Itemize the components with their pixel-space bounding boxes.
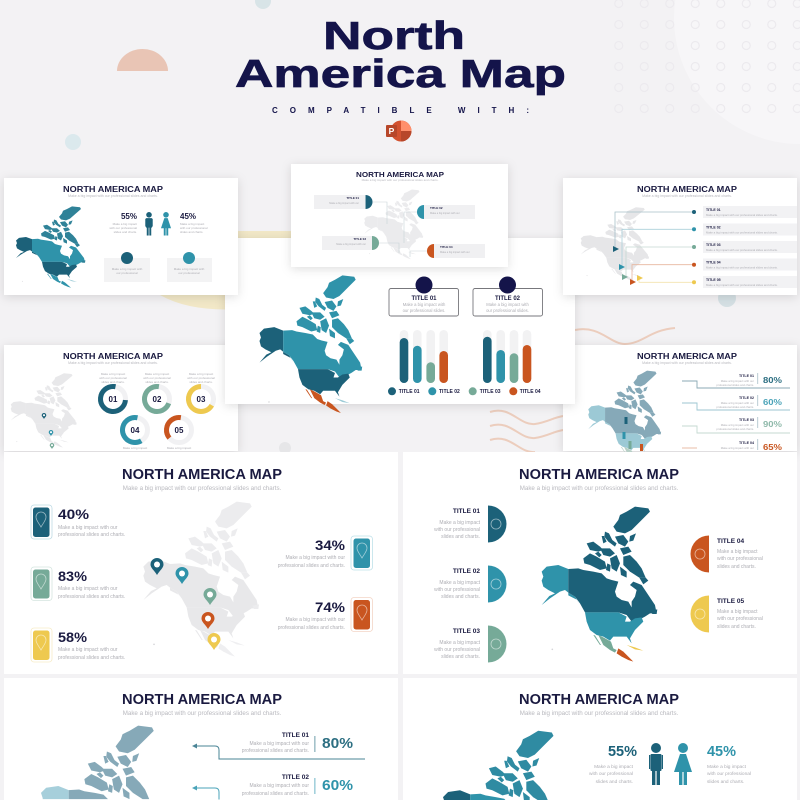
panel: lower-right slide percent list: TITLE 01 bbox=[739, 374, 754, 378]
panel: lower-left slide donut charts: with our professional bbox=[187, 376, 215, 380]
panel: lower-left slide donut charts: 05 bbox=[175, 426, 184, 435]
slide heading: NORTH AMERICA MAP bbox=[356, 172, 444, 179]
icon: PowerPoint bbox=[386, 120, 412, 142]
panel: lower-left slide donut charts: Make a big impact with our professional slides and charts. bbox=[68, 361, 158, 365]
icon: woman bbox=[674, 743, 692, 785]
item: title 01: slides and charts. bbox=[441, 534, 480, 540]
panel: top-left slide gender stats: Make a big impact bbox=[113, 222, 137, 226]
stat: 45%: Make a big impact bbox=[707, 764, 747, 770]
slide heading: NORTH AMERICA MAP bbox=[63, 352, 164, 361]
stat card: 40% bbox=[31, 505, 125, 539]
bar chart 01 bbox=[400, 330, 448, 383]
item: title 04: slides and charts. bbox=[717, 564, 756, 570]
row: 60%: TITLE 02 bbox=[282, 774, 309, 781]
bar chart 02 bbox=[483, 330, 531, 383]
panel: bottom-left slide percent list: Make a big impact with our professional slides and charts. bbox=[123, 710, 282, 717]
colored map bbox=[542, 507, 657, 662]
stat card: 83%: Make a big impact with our bbox=[58, 586, 118, 592]
panel: lower-left slide donut charts: 04 bbox=[131, 426, 140, 435]
panel: lower-right slide percent list: professional slides and charts. bbox=[716, 383, 754, 387]
stat: 55%: 55% bbox=[608, 743, 637, 760]
title: North bbox=[323, 15, 465, 58]
stat card: 40%: 40% bbox=[58, 506, 90, 522]
item: title 02: slides and charts. bbox=[441, 594, 480, 600]
stat card: 74%: 74% bbox=[315, 599, 346, 615]
stat card: 58%: professional slides and charts. bbox=[58, 655, 125, 661]
slide heading: NORTH AMERICA MAP bbox=[637, 352, 738, 361]
item: title 03: TITLE 03 bbox=[453, 628, 480, 635]
map bbox=[16, 206, 85, 288]
row: 60%: professional slides and charts. bbox=[242, 791, 309, 797]
panel: lower-right slide percent list: 65% bbox=[763, 443, 782, 452]
panel: large slide with colored map and half circles: Make a big impact with our professional slides and charts. bbox=[520, 485, 679, 492]
stat card: 40%: Make a big impact with our bbox=[58, 525, 118, 531]
icon: man bbox=[649, 743, 663, 785]
stat card: 74%: Make a big impact with our bbox=[286, 617, 345, 623]
item: title 01: Make a big impact bbox=[439, 520, 481, 526]
stat: 45%: slides and charts. bbox=[707, 779, 744, 785]
row: 60%: 60% bbox=[322, 777, 353, 794]
item: title 02: with our professional bbox=[434, 587, 480, 593]
callout box 01: Make a big impact with bbox=[403, 302, 446, 307]
slide heading: NORTH AMERICA MAP bbox=[63, 185, 164, 194]
item: title 02: Make a big impact bbox=[439, 580, 481, 586]
stat card: 83%: professional slides and charts. bbox=[58, 594, 125, 600]
panel: lower-right slide percent list: TITLE 04 bbox=[739, 441, 754, 445]
item: title 03: Make a big impact bbox=[439, 640, 481, 646]
icon: PowerPoint: P bbox=[389, 126, 395, 136]
panel: lower-right slide percent list: Make a big impact with our professional slides and charts. bbox=[642, 361, 732, 365]
row: 80%: TITLE 01 bbox=[282, 732, 309, 739]
item: title 01 bbox=[434, 506, 507, 542]
panel: lower-left slide donut charts: 02 bbox=[153, 395, 162, 404]
stat: 55% bbox=[589, 743, 637, 785]
panel: lower-left slide donut charts: slides and charts. bbox=[189, 380, 213, 384]
panel: top-left slide gender stats: Make a big impact with bbox=[112, 267, 143, 271]
callout box 01: TITLE 01 bbox=[411, 296, 437, 302]
stat card: 74%: professional slides and charts. bbox=[278, 625, 345, 631]
panel: top-right slide connector list: TITLE 01 bbox=[706, 208, 721, 212]
panel: lower-left slide donut charts: 03 bbox=[197, 395, 206, 404]
panel: top-right slide connector list: TITLE 03 bbox=[706, 243, 721, 247]
stat: 55%: slides and charts. bbox=[596, 779, 633, 785]
item: title 04: TITLE 04 bbox=[717, 538, 744, 545]
panel: top-right slide connector list: Make a big impact with our professional slides and charts. bbox=[706, 213, 778, 217]
panel: large slide with colored map and half circles bbox=[403, 452, 797, 674]
panel: center slide bar charts bbox=[225, 238, 575, 413]
panel: lower-right slide percent list: Make a big impact with our bbox=[721, 423, 754, 427]
stat: 45%: 45% bbox=[707, 743, 736, 760]
row: 60%: Make a big impact with our bbox=[250, 783, 309, 789]
panel: top-center slide callouts bbox=[291, 164, 508, 267]
map bbox=[260, 275, 362, 413]
panel: lower-left slide donut charts: Make a big impact bbox=[101, 372, 125, 376]
subtitle: compatible with: COMPATIBLE WITH: bbox=[272, 106, 529, 115]
stat card: 34%: 34% bbox=[315, 537, 346, 553]
stat card: 58%: Make a big impact with our bbox=[58, 647, 118, 653]
panel: large slide with pins and percentages: Make a big impact with our professional slides and charts. bbox=[123, 485, 282, 492]
item: title 02: TITLE 02 bbox=[453, 568, 480, 575]
map bbox=[443, 731, 554, 800]
callout box 02: TITLE 02 bbox=[495, 296, 521, 302]
slide heading: NORTH AMERICA MAP bbox=[519, 467, 679, 483]
stat card: 58% bbox=[31, 628, 125, 662]
panel: top-center slide callouts: TITLE 04 bbox=[440, 245, 453, 249]
map bbox=[364, 190, 423, 259]
legend: TITLE 03 bbox=[480, 389, 501, 395]
panel: lower-left slide donut charts: with our professional bbox=[143, 376, 171, 380]
stat card: 34% bbox=[278, 536, 372, 570]
panel: bottom-right slide gender stats bbox=[403, 678, 797, 800]
panel: top-center slide callouts: Make a big impact with our bbox=[440, 251, 470, 254]
panel: top-right slide connector list: TITLE 02 bbox=[706, 226, 721, 230]
panel: lower-left slide donut charts: Make a big impact bbox=[145, 372, 169, 376]
panel: lower-right slide percent list: TITLE 02 bbox=[739, 396, 754, 400]
panel: lower-right slide percent list: Make a big impact with our bbox=[721, 379, 754, 383]
panel: lower-left slide donut charts: slides and charts. bbox=[101, 380, 125, 384]
item: title 04: Make a big impact bbox=[717, 549, 758, 555]
panel: top-center slide callouts: Make a big impact with our bbox=[430, 212, 460, 215]
panel: top-right slide connector list: Make a big impact with our professional slides and charts. bbox=[706, 230, 778, 234]
item: title 05: TITLE 05 bbox=[717, 598, 744, 605]
panel: top-right slide connector list: Make a big impact with our professional slides and charts. bbox=[706, 266, 778, 270]
item: title 01: TITLE 01 bbox=[453, 508, 480, 515]
panel: lower-right slide percent list: TITLE 03 bbox=[739, 418, 754, 422]
panel: bottom-left slide percent list bbox=[4, 678, 398, 800]
stat: 45%: with our professional bbox=[707, 771, 751, 777]
panel: lower-right slide percent list: 60% bbox=[763, 398, 782, 407]
stat card: 58%: 58% bbox=[58, 629, 88, 645]
panel: top-right slide connector list bbox=[563, 178, 797, 295]
legend: TITLE 04 bbox=[520, 389, 541, 395]
panel: top-left slide gender stats: slides and charts. bbox=[180, 230, 204, 234]
panel: top-left slide gender stats: 55% bbox=[121, 212, 137, 221]
slide heading: NORTH AMERICA MAP bbox=[122, 692, 282, 708]
panel: lower-left slide donut charts: slides and charts. bbox=[145, 380, 169, 384]
row: 80%: professional slides and charts. bbox=[242, 748, 309, 754]
item: title 02 bbox=[434, 566, 507, 603]
panel: top-left slide gender stats: our professional bbox=[116, 271, 138, 275]
panel: lower-left slide donut charts: Make a big impact bbox=[123, 446, 147, 450]
title bbox=[235, 15, 566, 96]
panel: top-left slide gender stats: Make a big impact bbox=[180, 222, 205, 226]
item: title 03: with our professional bbox=[434, 647, 480, 653]
callout box 02: Make a big impact with bbox=[486, 302, 529, 307]
panel: top-left slide gender stats: Make a big impact with bbox=[174, 267, 205, 271]
callout box 01 bbox=[389, 276, 458, 316]
panel: lower-left slide donut charts: with our professional bbox=[99, 376, 127, 380]
item: title 04 bbox=[690, 536, 763, 572]
row: 80%: 80% bbox=[322, 735, 353, 752]
panel: top-left slide gender stats: with our professional bbox=[180, 226, 208, 230]
slide heading: NORTH AMERICA MAP bbox=[637, 185, 738, 194]
row: 80% bbox=[192, 732, 365, 759]
panel: top-center slide callouts: Make a big impact with our bbox=[336, 243, 366, 246]
panel: top-center slide callouts: TITLE 03 bbox=[353, 237, 366, 241]
panel: top-center slide callouts: TITLE 02 bbox=[430, 206, 443, 210]
item: title 03: slides and charts. bbox=[441, 654, 480, 660]
stat card: 74% bbox=[278, 598, 372, 632]
callout box 02: our professional slides. bbox=[486, 308, 529, 313]
stat: 55%: with our professional bbox=[589, 771, 633, 777]
map bbox=[581, 207, 649, 282]
stat: 55%: Make a big impact bbox=[594, 764, 634, 770]
item: title 05 bbox=[690, 596, 763, 632]
title: America Map bbox=[235, 53, 566, 96]
map bbox=[588, 371, 661, 463]
panel: lower-left slide donut charts bbox=[4, 345, 238, 451]
panel: lower-right slide percent list bbox=[563, 345, 797, 463]
panel: lower-right slide percent list: professional slides and charts. bbox=[716, 405, 754, 409]
panel: top-right slide connector list: TITLE 05 bbox=[706, 278, 721, 282]
panel: top-center slide callouts: Make a big impact with our professional slides and charts. bbox=[362, 178, 439, 182]
panel: lower-left slide donut charts: Make a big impact bbox=[189, 372, 213, 376]
callout box 02 bbox=[473, 276, 542, 316]
panel: top-left slide gender stats bbox=[4, 178, 238, 295]
item: title 04: with our professional bbox=[717, 556, 763, 562]
panel: bottom-right slide gender stats: Make a big impact with our professional slides and charts. bbox=[520, 710, 679, 717]
panel: top-left slide gender stats: slides and charts. bbox=[114, 230, 137, 234]
panel: top-left slide gender stats: with our professional bbox=[109, 226, 137, 230]
item: title 05: slides and charts. bbox=[717, 624, 756, 630]
legend: TITLE 02 bbox=[439, 389, 460, 395]
panel: top-left slide gender stats: Make a big impact with our professional slides and charts. bbox=[68, 194, 158, 198]
row: 80%: Make a big impact with our bbox=[250, 741, 309, 747]
map bbox=[41, 726, 154, 799]
grey map bbox=[143, 502, 259, 657]
panel: top-left slide gender stats: 45% bbox=[180, 212, 196, 221]
stat card: 83%: 83% bbox=[58, 568, 88, 584]
panel: lower-right slide percent list: 80% bbox=[763, 376, 782, 385]
panel: top-right slide connector list: Make a big impact with our professional slides and charts. bbox=[642, 194, 732, 198]
panel: top-center slide callouts: Make a big impact with our bbox=[329, 202, 359, 205]
item: title 03 bbox=[434, 626, 507, 662]
panel: top-center slide callouts: TITLE 01 bbox=[346, 196, 359, 200]
panel: lower-right slide percent list: Make a big impact with our bbox=[721, 401, 754, 405]
callout box 01: our professional slides. bbox=[403, 308, 445, 313]
panel: large slide with pins and percentages bbox=[4, 452, 398, 674]
panel: lower-right slide percent list: Make a big impact with our bbox=[721, 446, 754, 450]
legend: TITLE 01 bbox=[399, 389, 420, 395]
stat: 45% bbox=[707, 743, 751, 785]
map with pins bbox=[11, 373, 77, 448]
stat card: 83% bbox=[31, 567, 125, 600]
panel: lower-left slide donut charts: Make a big impact bbox=[167, 446, 191, 450]
legend bbox=[388, 387, 541, 395]
panel: top-right slide connector list: Make a big impact with our professional slides and charts. bbox=[706, 248, 778, 252]
panel: top-right slide connector list: TITLE 04 bbox=[706, 260, 721, 264]
item: title 05: with our professional bbox=[717, 616, 763, 622]
row: 60% bbox=[192, 774, 353, 800]
panel: lower-left slide donut charts: 01 bbox=[109, 395, 118, 404]
map pins bbox=[150, 558, 220, 650]
panel: top-right slide connector list: Make a big impact with our professional slides and charts. bbox=[706, 283, 778, 287]
stat card: 34%: Make a big impact with our bbox=[286, 555, 345, 561]
stat card: 34%: professional slides and charts. bbox=[278, 563, 345, 569]
slide heading: NORTH AMERICA MAP bbox=[122, 467, 282, 483]
panel: lower-right slide percent list: professional slides and charts. bbox=[716, 427, 754, 431]
item: title 05: Make a big impact bbox=[717, 609, 758, 615]
stat card: 40%: professional slides and charts. bbox=[58, 532, 125, 538]
panel: top-left slide gender stats: our professional bbox=[178, 271, 200, 275]
panel: lower-right slide percent list: 90% bbox=[763, 420, 782, 429]
slide heading: NORTH AMERICA MAP bbox=[519, 692, 679, 708]
item: title 01: with our professional bbox=[434, 527, 480, 533]
